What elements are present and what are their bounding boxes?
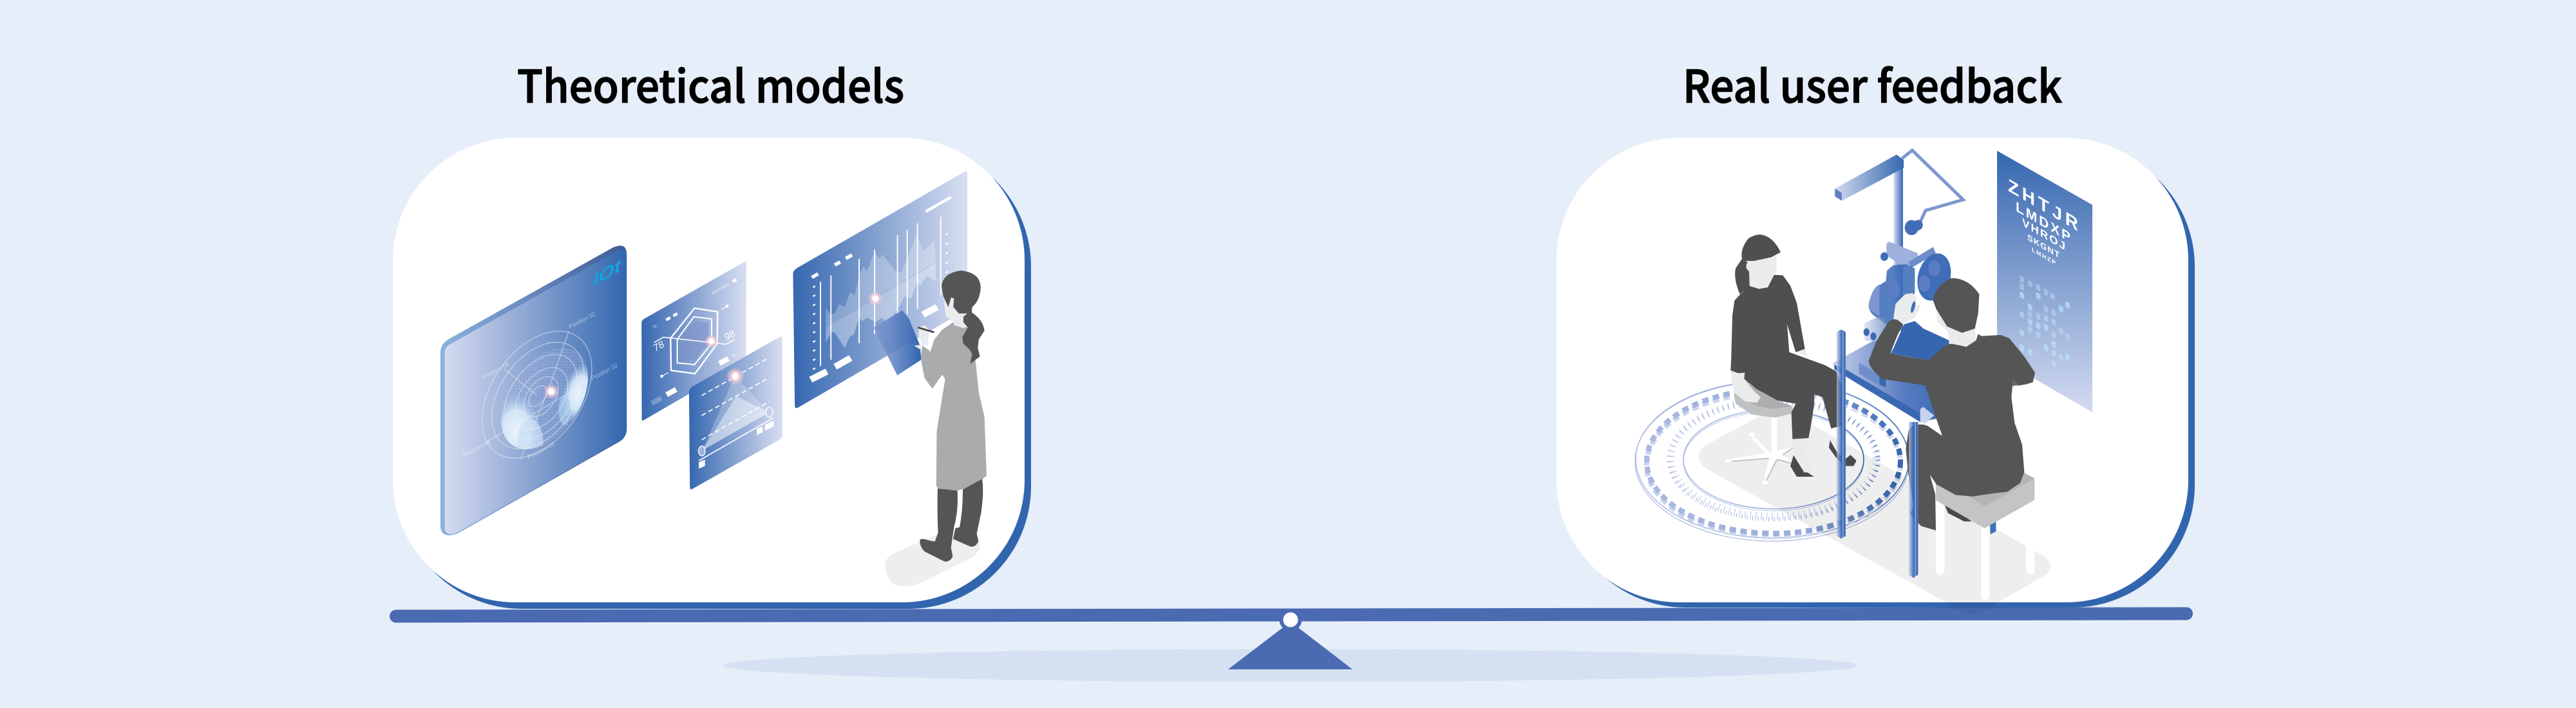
patient hair — [1741, 234, 1781, 261]
pole: front — [1837, 330, 1846, 539]
polar labels: Position 04 — [462, 439, 491, 459]
heading: Theoretical models: Theoretical models — [517, 51, 904, 115]
screen: time-series chart — [793, 171, 967, 408]
phoropter left lens — [1869, 264, 1915, 324]
screen: hexagon radar: 78 — [652, 340, 667, 354]
analyst hand — [914, 325, 930, 350]
panel: theoretical models — [393, 138, 1031, 609]
eye chart letters: LMDXP — [2016, 198, 2070, 245]
balance beam — [396, 613, 2186, 616]
polar heat map — [501, 348, 589, 450]
examiner face and neck — [1937, 311, 1976, 347]
eye test chart — [1997, 151, 2092, 412]
machine base box — [1864, 317, 1893, 343]
near leg — [920, 488, 958, 562]
machine mast — [1894, 166, 1903, 330]
patient near sock — [1792, 437, 1814, 475]
patient's stool base — [1725, 417, 1795, 485]
machine headrest knob — [1905, 220, 1923, 235]
shadow — [886, 535, 980, 587]
tablet — [873, 311, 921, 376]
patient far foot — [1829, 440, 1857, 466]
examiner body — [1869, 318, 2035, 530]
polar labels: Position 01 — [567, 311, 597, 330]
phoropter bar — [1908, 247, 1936, 269]
analyst legs and shadow — [886, 479, 983, 587]
chart highlight — [544, 384, 559, 399]
polar labels: Position 05 — [481, 361, 511, 381]
patient near foot — [1790, 455, 1814, 477]
figure: analyst upper body — [914, 271, 987, 492]
eye chart letters: LMHZP — [2032, 247, 2056, 267]
patient ponytail — [1735, 259, 1750, 294]
balance pivot — [1282, 611, 1300, 629]
screen: hexagon radar — [641, 262, 746, 421]
panel: real user feedback — [1557, 138, 2195, 615]
examiner hand — [1893, 293, 1921, 324]
screen: triangle plot — [689, 337, 782, 490]
polar labels — [462, 311, 620, 461]
analyst pen — [918, 327, 934, 332]
eye chart letters: VHROJ — [2022, 215, 2065, 253]
floor shadow — [1699, 406, 2050, 615]
eye chart pixel grid — [2020, 275, 2070, 368]
eye chart letters — [2008, 175, 2078, 267]
machine top arm — [1835, 155, 1904, 201]
patient face — [1747, 256, 1777, 288]
eye chart letters: SKGNT — [2027, 232, 2060, 260]
machine body — [1891, 321, 1949, 359]
examiner's seat — [1936, 473, 2034, 528]
machine wire arm — [1902, 150, 1963, 224]
far leg — [953, 479, 983, 547]
polar labels: Position 02 — [590, 362, 620, 381]
pole: rear — [1909, 422, 1918, 578]
ground shadow — [723, 649, 1857, 682]
eye chart letters: ZHTJR — [2008, 175, 2078, 235]
screen: IOT polar chart — [440, 245, 627, 535]
balance fulcrum — [1228, 622, 1352, 669]
machine and examiner — [1833, 150, 2035, 530]
table — [1833, 340, 1949, 422]
examiner hair — [1933, 278, 1979, 333]
patient hands — [1730, 349, 1808, 403]
polar rings — [459, 311, 614, 479]
heading: Real user feedback: Real user feedback — [1683, 51, 2062, 115]
examiner's stool legs — [1936, 498, 2034, 601]
screen: hexagon radar: 98 — [723, 329, 737, 343]
patient body — [1730, 275, 1844, 439]
analyst hair — [942, 271, 985, 364]
dial graphic — [1635, 381, 1909, 541]
polar labels: Position 03 — [526, 441, 556, 461]
phoropter bracket — [1886, 242, 1918, 266]
analyst face — [943, 296, 968, 328]
illustration: data screens and analyst — [641, 171, 987, 492]
logo: IOT: IOt — [593, 255, 621, 291]
figure: patient — [1730, 234, 1857, 477]
analyst coat — [921, 322, 987, 492]
floor shadow overlap on beam — [1938, 607, 2007, 615]
phoropter right lens — [1913, 249, 1956, 305]
patient seat — [1734, 394, 1792, 417]
